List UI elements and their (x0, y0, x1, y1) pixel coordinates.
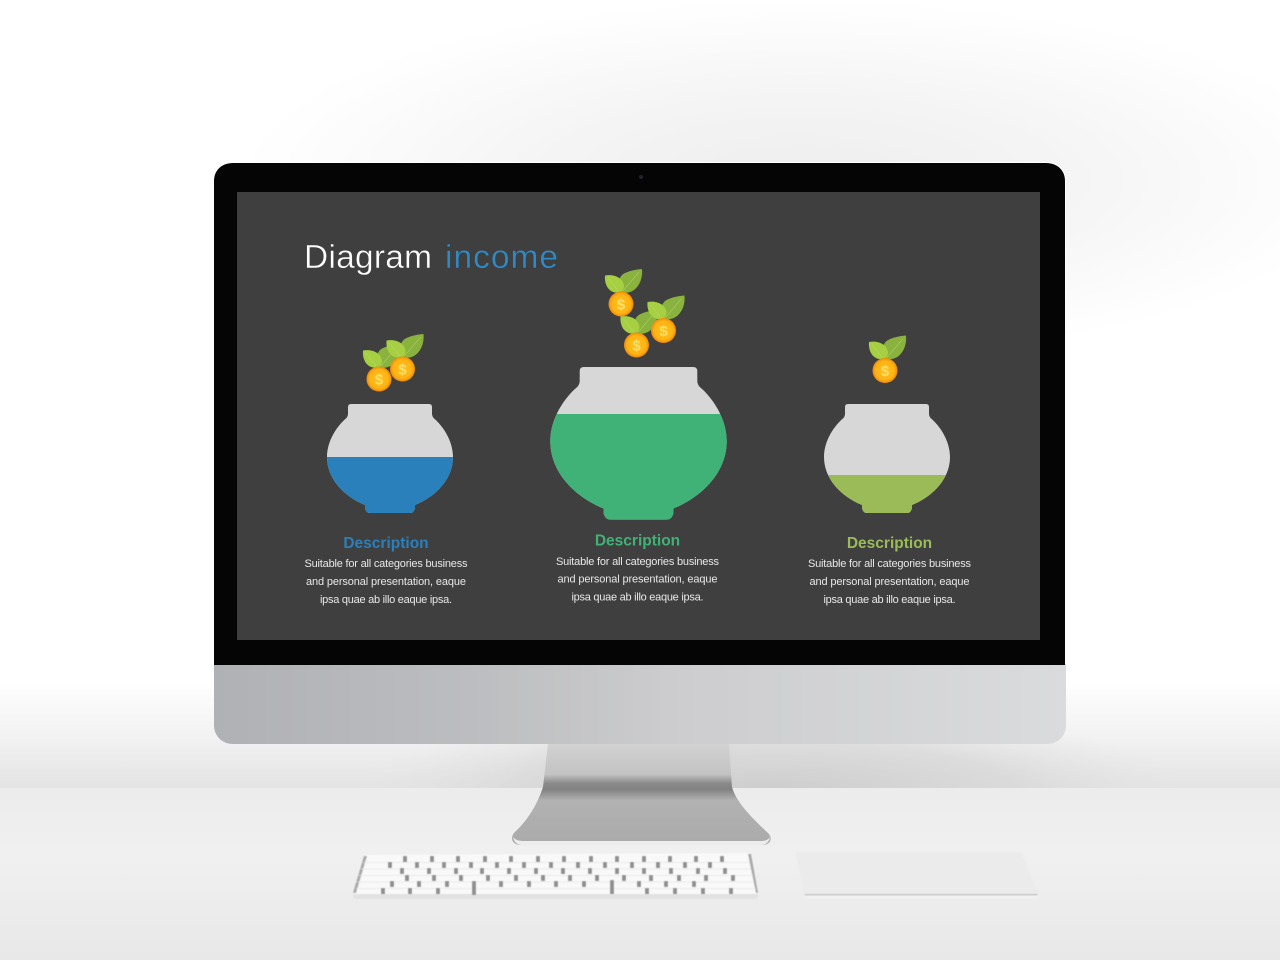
monitor chin (214, 664, 1066, 744)
title: income (445, 239, 558, 276)
description text: and personal presentation, eaque (558, 574, 718, 586)
icon: coin with leaves (869, 336, 906, 383)
pot (327, 404, 453, 513)
icon: coin with leaves: $ (881, 363, 890, 380)
pot (824, 404, 950, 513)
title: Diagram (304, 239, 432, 276)
panel: left pot (304, 334, 468, 606)
description heading: Description (847, 535, 932, 552)
icon: coins with leaves: $ (632, 338, 641, 354)
description text: and personal presentation, eaque (306, 576, 466, 588)
icon: coins with leaves: $ (617, 296, 626, 314)
description text (556, 556, 720, 604)
description text: ipsa quae ab illo eaque ipsa. (320, 594, 452, 606)
icon: coins with leaves: $ (375, 372, 384, 388)
monitor bezel (214, 163, 1065, 665)
title (304, 239, 558, 276)
description text: Suitable for all categories business (304, 558, 468, 570)
description text: and personal presentation, eaque (810, 576, 970, 588)
icon: coins with leaves (363, 334, 424, 392)
description heading: Description (595, 532, 680, 550)
pot (550, 367, 727, 520)
description text: ipsa quae ab illo eaque ipsa. (824, 594, 956, 606)
description text (304, 558, 468, 606)
description heading: Description (343, 535, 429, 552)
trackpad (796, 852, 1038, 898)
background: desk (0, 788, 1280, 960)
icon: coins with leaves: $ (659, 323, 668, 340)
description text: Suitable for all categories business (556, 556, 720, 568)
monitor edge highlight (213, 162, 1066, 300)
slide screen (237, 192, 1040, 640)
icon: coins with leaves: $ (398, 362, 407, 378)
description text: Suitable for all categories business (808, 558, 972, 570)
icon: coins with leaves (605, 269, 685, 358)
panel: center pot (550, 269, 727, 604)
webcam (639, 175, 643, 179)
panel: right pot (808, 336, 972, 606)
keyboard (353, 853, 758, 899)
monitor (213, 162, 1066, 744)
monitor stand (512, 744, 771, 845)
description text: ipsa quae ab illo eaque ipsa. (572, 592, 704, 604)
description text (808, 558, 972, 606)
